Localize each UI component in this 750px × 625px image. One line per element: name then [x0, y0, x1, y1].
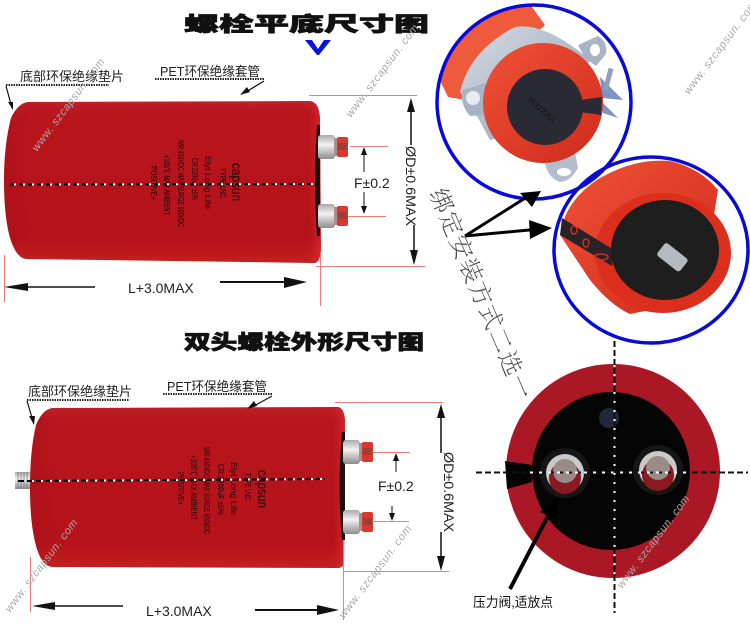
dimension: length (top): L+3.0MAX: [128, 280, 194, 296]
printed marking: POSITIVE+: [176, 472, 186, 505]
center lines: [476, 341, 748, 613]
panel: bottom capacitor drawing: [15, 407, 373, 568]
vent bung: [599, 408, 619, 428]
cylinder: [560, 161, 718, 314]
watermarks: www. szcapsun. com: [615, 493, 693, 591]
dimension: diameter (bottom): [335, 402, 457, 572]
label: PET sleeve (bottom): PET环保绝缘套管: [167, 379, 267, 394]
label: bottom insulating pad (bottom): [27, 384, 132, 425]
watermarks: www. szcapsun. com: [30, 56, 108, 154]
photo: stud mount capacitor in blue circle: [554, 157, 748, 343]
printed marking: WR:450VDC MAX SURGE 500VDC: [202, 447, 212, 534]
capacitor rear and strap: [440, 6, 590, 140]
label: bottom insulating pad (top): [6, 69, 124, 110]
center line: [10, 183, 318, 186]
dimension: F pitch (top): F±0.2: [354, 175, 390, 191]
dimension: diameter (top): ØD±0.6MAX: [403, 146, 419, 227]
dimension: length (top): [4, 252, 320, 306]
dimension: length (bottom): L+3.0MAX: [146, 603, 212, 619]
end face: [595, 193, 731, 313]
terminals: [318, 135, 348, 228]
panel: top capacitor drawing: [4, 101, 348, 263]
text: mounting options: 绑定安装方式二选一: [423, 182, 543, 404]
printed marking: Elyt Long Life: [203, 156, 213, 209]
stud: [15, 472, 30, 489]
stud: [656, 242, 689, 273]
label: PET sleeve (bottom): [163, 379, 273, 409]
red outer ring: [506, 364, 720, 578]
printed marking: WR:450VDC MAX SURGE 500VDC: [176, 140, 186, 227]
center line: [18, 479, 325, 481]
blue circle: [554, 157, 748, 343]
label: bottom insulating pad (bottom): 底部环保绝缘垫片: [28, 384, 132, 399]
icon: blue V mark: [305, 40, 331, 55]
title: double-stud: 双头螺栓外形尺寸图: [184, 326, 424, 355]
black inner disc: [532, 392, 690, 550]
polarity stripe: [505, 461, 532, 489]
left terminal: [540, 448, 590, 498]
panel: end view of terminals: [473, 341, 748, 613]
dimension: diameter (bottom): ØD±0.6MAX: [441, 452, 457, 533]
label: bottom insulating pad (top): 底部环保绝缘垫片: [20, 69, 124, 84]
photo: bracket mount capacitor in blue circle: [430, 0, 631, 199]
printed marking: TYPE LNC: [243, 473, 253, 500]
dimension: F pitch (bottom): F±0.2: [378, 478, 414, 494]
printed marking: TYPE LNC: [218, 168, 228, 198]
printed marking: capsun: [255, 470, 271, 508]
capacitor body: [30, 407, 345, 568]
dimension: F pitch (bottom): [372, 452, 414, 522]
capacitor body: [4, 101, 321, 263]
watermarks: www. szcapsun. com: [344, 22, 422, 120]
printed marking: CR:2200uF ±5%: [190, 158, 200, 200]
right terminal: [633, 445, 683, 495]
printed marking: [176, 447, 271, 534]
title: top: 螺栓平底尺寸图: [184, 8, 429, 37]
label: PET sleeve (top): [155, 64, 265, 95]
printed marking: +105℃ MAX AMBIENT: [189, 455, 199, 520]
printed marking: Elyt Long Life: [229, 462, 239, 515]
printed marking: [149, 140, 245, 227]
printed marking: POSITIVE+: [149, 166, 159, 200]
terminals: [343, 440, 373, 534]
blue circle: [437, 5, 631, 199]
dimension: F pitch (top): [348, 146, 390, 216]
part code: T6322201: [525, 95, 559, 125]
watermarks: www. szcapsun. com: [337, 523, 415, 621]
label: PET sleeve (top): PET环保绝缘套管: [160, 64, 260, 79]
capacitor end face: [483, 43, 603, 163]
dimension: diameter (top): [309, 96, 425, 266]
pressure valve leader: [510, 497, 558, 589]
watermarks: www. szcapsun. com: [3, 517, 81, 615]
printed marking: +105℃ MAX AMBIENT: [162, 155, 172, 215]
printed marking: CR:2200uF ±5%: [216, 464, 226, 515]
bracket tabs: [462, 36, 623, 182]
arrows: to mount options: [465, 191, 552, 239]
text: pressure valve: 压力阀,适放点: [473, 595, 553, 610]
polarity stripe: [560, 218, 614, 266]
dimension: length (bottom): [30, 540, 344, 620]
printed marking: capsun: [229, 163, 245, 201]
